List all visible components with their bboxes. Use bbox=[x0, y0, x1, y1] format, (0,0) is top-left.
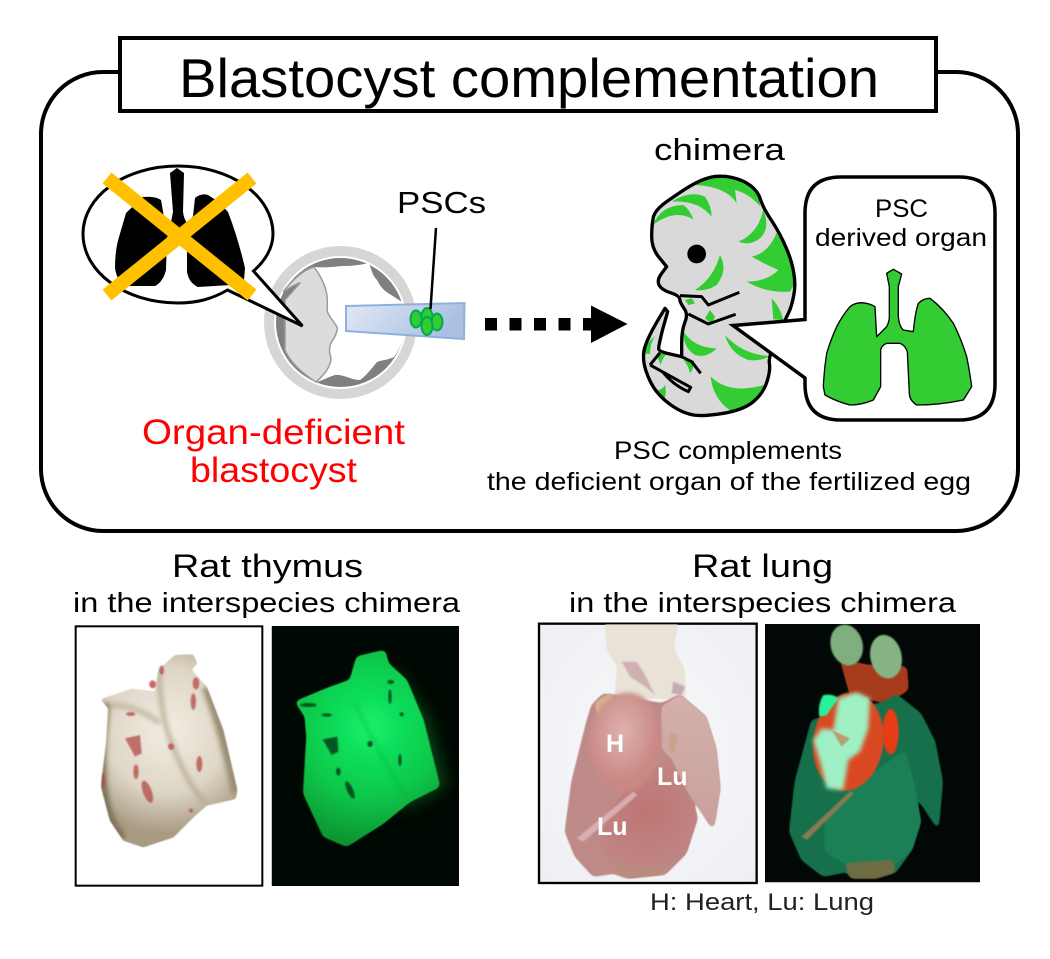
photo labels: H and Lu: Lu bbox=[597, 813, 628, 841]
icon: green lungs bbox=[823, 269, 972, 405]
pointer line to PSCs bbox=[430, 228, 436, 309]
text block: complement caption: PSC complements bbox=[614, 437, 842, 465]
icon: yellow cross bbox=[107, 178, 252, 295]
photo labels: H and Lu: H bbox=[606, 730, 624, 758]
photo: lung fluorescence bbox=[765, 621, 980, 882]
label: organ-deficient blastocyst bbox=[142, 413, 405, 490]
callout: PSC derived organ bbox=[733, 177, 995, 420]
callout: speech bubble with deficient lungs bbox=[83, 166, 302, 326]
silhouette of lung lobes bbox=[565, 693, 720, 878]
heading: rat lung: Rat lung bbox=[692, 548, 833, 584]
callout text: PSC bbox=[875, 195, 928, 223]
arrow: dotted arrow to chimera bbox=[485, 306, 628, 343]
icon: chimera embryo bbox=[643, 175, 797, 416]
PSCs label: PSCs bbox=[397, 185, 486, 220]
chimera label: chimera bbox=[654, 132, 786, 167]
photo: thymus GFP fluorescence bbox=[272, 626, 459, 886]
photo labels: H and Lu bbox=[597, 730, 688, 841]
icon: blastocyst embryo bbox=[269, 251, 412, 394]
text block: complement caption: the deficient organ of the fertilized egg bbox=[487, 468, 971, 496]
heading: rat thymus bbox=[73, 548, 460, 618]
callout: PSC derived organ: derived organ bbox=[815, 224, 987, 252]
photo: thymus brightfield bbox=[76, 626, 262, 886]
heading: rat lung bbox=[569, 548, 956, 618]
title: Blastocyst complementation bbox=[179, 47, 879, 109]
icon: injection pipette with PSCs bbox=[346, 303, 464, 339]
photo labels: H and Lu: Lu bbox=[657, 763, 688, 791]
photo: lung brightfield bbox=[539, 622, 757, 883]
caption: abbreviations: H: Heart, Lu: Lung bbox=[650, 889, 874, 916]
heading: rat thymus: Rat thymus bbox=[172, 548, 363, 584]
panel: blastocyst complementation frame bbox=[41, 72, 1018, 531]
icon: black lungs bbox=[115, 168, 245, 287]
silhouette of fluorescent lungs bbox=[789, 694, 943, 877]
heading: rat thymus: in the interspecies chimera bbox=[73, 587, 460, 618]
label: organ-deficient blastocyst: blastocyst bbox=[190, 451, 357, 490]
label: organ-deficient blastocyst: Organ-deficient bbox=[142, 413, 405, 452]
heading: rat lung: in the interspecies chimera bbox=[569, 587, 956, 618]
text block: complement caption bbox=[487, 437, 971, 496]
